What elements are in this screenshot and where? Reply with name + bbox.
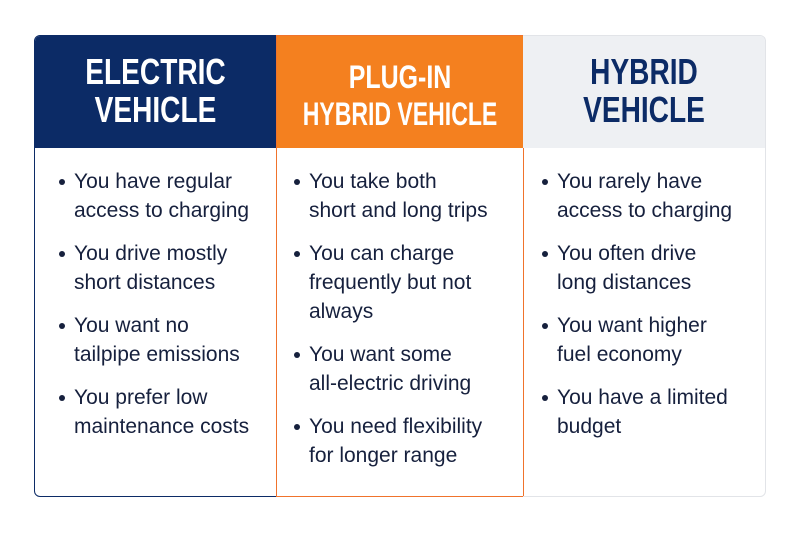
column: hybrid vehicle: [523, 35, 766, 497]
list: electric vehicle reasons: [59, 170, 249, 438]
list: hybrid reasons: You want higher: [557, 314, 707, 337]
list: plug-in hybrid reasons: You need flexibility: [309, 415, 482, 438]
header: hybrid vehicle: VEHICLE: [583, 89, 705, 130]
list: hybrid reasons: You often drive: [557, 242, 696, 265]
list: plug-in hybrid reasons: for longer range: [309, 444, 457, 467]
list: plug-in hybrid reasons: short and long trips: [309, 199, 488, 222]
list: electric vehicle reasons: You drive mostly: [74, 242, 227, 265]
list: electric vehicle reasons: short distances: [74, 271, 215, 294]
header: plug-in hybrid: PLUG-IN: [349, 59, 451, 95]
list: electric vehicle reasons: maintenance costs: [74, 415, 249, 438]
list: electric vehicle reasons: tailpipe emissions: [74, 343, 240, 366]
header: electric vehicle: ELECTRIC: [85, 51, 226, 92]
list: plug-in hybrid reasons: all-electric driving: [309, 372, 471, 395]
column: plug-in hybrid: [276, 35, 524, 497]
list: hybrid reasons: fuel economy: [557, 343, 682, 366]
list: hybrid reasons: You have a limited: [557, 386, 728, 409]
list: electric vehicle reasons: You want no: [74, 314, 189, 337]
header: plug-in hybrid: [277, 36, 523, 148]
list: hybrid reasons: You rarely have: [557, 170, 702, 193]
list: hybrid reasons: [542, 170, 732, 438]
column: electric vehicle: [34, 35, 277, 497]
list: plug-in hybrid reasons: You want some: [309, 343, 452, 366]
list: electric vehicle reasons: You have regular: [74, 170, 232, 193]
header: electric vehicle: VEHICLE: [95, 89, 216, 130]
header: hybrid vehicle: [523, 36, 765, 148]
list: plug-in hybrid reasons: You take both: [309, 170, 437, 193]
header: hybrid vehicle: HYBRID: [590, 51, 698, 92]
list: hybrid reasons: budget: [557, 415, 621, 438]
list: hybrid reasons: access to charging: [557, 199, 732, 222]
header: electric vehicle: [35, 36, 276, 148]
list: hybrid reasons: long distances: [557, 271, 691, 294]
header: plug-in hybrid: HYBRID VEHICLE: [303, 96, 497, 132]
list: plug-in hybrid reasons: frequently but not: [309, 271, 471, 294]
list: plug-in hybrid reasons: always: [309, 300, 373, 323]
list: electric vehicle reasons: You prefer low: [74, 386, 207, 409]
list: electric vehicle reasons: access to charging: [74, 199, 249, 222]
list: plug-in hybrid reasons: [294, 170, 488, 467]
list: plug-in hybrid reasons: You can charge: [309, 242, 454, 265]
